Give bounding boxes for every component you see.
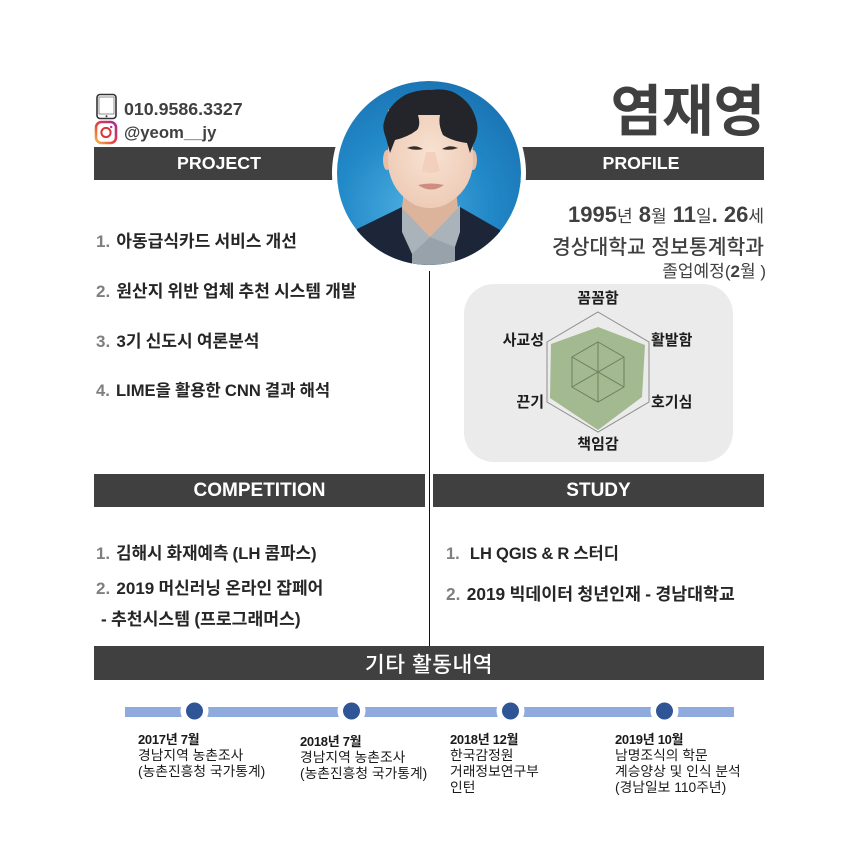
radar chart: 활발함 bbox=[651, 332, 693, 349]
competition list: - 추천시스템 (프로그래머스) bbox=[101, 609, 301, 629]
heading: other activities: 기타 활동내역 bbox=[365, 652, 493, 676]
profile: university: 경상대학교 정보통계학과 bbox=[552, 237, 764, 259]
event: 2017 July: 경남지역 농촌조사 bbox=[138, 748, 243, 763]
project list bbox=[96, 232, 356, 400]
event: 2017 July: (농촌진흥청 국가통계) bbox=[138, 764, 265, 779]
event: 2019 October: (경남일보 110주년) bbox=[615, 780, 726, 795]
vertical divider bbox=[429, 271, 430, 646]
radar chart: 사교성 bbox=[503, 332, 544, 349]
timeline bbox=[125, 702, 734, 720]
study list: 2. 2019 빅데이터 청년인재 - 경남대학교 bbox=[446, 584, 735, 604]
competition list: 1. 김해시 화재예측 (LH 콤파스) bbox=[96, 544, 317, 563]
project list: 4. LIME을 활용한 CNN 결과 해석 bbox=[96, 381, 330, 400]
icon: phone bbox=[96, 94, 117, 120]
heading: COMPETITION: COMPETITION bbox=[194, 480, 325, 500]
study list: 1. LH QGIS & R 스터디 bbox=[446, 545, 619, 563]
heading: PROFILE bbox=[514, 147, 764, 180]
project list: 2. 원산지 위반 업체 추천 시스템 개발 bbox=[96, 282, 356, 301]
event: 2018 December: 2018년 12월 bbox=[450, 732, 518, 747]
panel: radar chart bbox=[464, 284, 733, 462]
icon: instagram bbox=[94, 120, 118, 144]
radar chart: 끈기 bbox=[516, 394, 544, 411]
radar chart bbox=[503, 290, 693, 453]
photo portrait bbox=[332, 81, 526, 265]
contact: instagram handle: @yeom__jy bbox=[124, 123, 216, 142]
event: 2018 July: 2018년 7월 bbox=[300, 734, 361, 749]
profile: birth date: 1995년 8월 11일. 26세 bbox=[568, 202, 764, 227]
name title: 염재영 bbox=[610, 67, 765, 148]
heading: PROJECT bbox=[94, 147, 344, 180]
project list: 3. 3기 신도시 여론분석 bbox=[96, 332, 259, 351]
profile: graduation: 졸업예정(2월 ) bbox=[662, 262, 766, 281]
heading: COMPETITION bbox=[94, 474, 425, 507]
event: 2018 December: 거래정보연구부 bbox=[450, 764, 539, 779]
event: 2018 July: 경남지역 농촌조사 bbox=[300, 750, 405, 765]
heading: STUDY: STUDY bbox=[566, 480, 631, 500]
heading: PROJECT: PROJECT bbox=[177, 153, 261, 173]
competition list: 2. 2019 머신러닝 온라인 잡페어 bbox=[96, 579, 323, 598]
event: 2018 December: 한국감정원 bbox=[450, 748, 513, 763]
event: 2018 July bbox=[300, 734, 427, 781]
radar chart: 책임감 bbox=[577, 436, 619, 453]
heading: STUDY bbox=[433, 474, 764, 507]
event: 2017 July bbox=[138, 732, 265, 779]
event: 2018 December bbox=[450, 732, 539, 795]
heading: other activities bbox=[94, 646, 764, 680]
event: 2017 July: 2017년 7월 bbox=[138, 732, 199, 747]
event: 2018 December: 인턴 bbox=[450, 780, 475, 795]
event: 2019 October: 2019년 10월 bbox=[615, 732, 683, 747]
contact: phone number: 010.9586.3327 bbox=[124, 99, 243, 119]
project list: 1. 아동급식카드 서비스 개선 bbox=[96, 232, 297, 251]
event: 2018 July: (농촌진흥청 국가통계) bbox=[300, 766, 427, 781]
heading: PROFILE: PROFILE bbox=[602, 153, 680, 173]
event: 2019 October bbox=[615, 732, 741, 795]
event: 2019 October: 계승양상 및 인식 분석 bbox=[615, 764, 741, 779]
event: 2019 October: 남명조식의 학문 bbox=[615, 748, 708, 763]
radar chart: 꼼꼼함 bbox=[577, 290, 619, 307]
radar chart: 호기심 bbox=[651, 394, 692, 411]
competition list bbox=[96, 544, 323, 629]
study list bbox=[446, 544, 735, 604]
